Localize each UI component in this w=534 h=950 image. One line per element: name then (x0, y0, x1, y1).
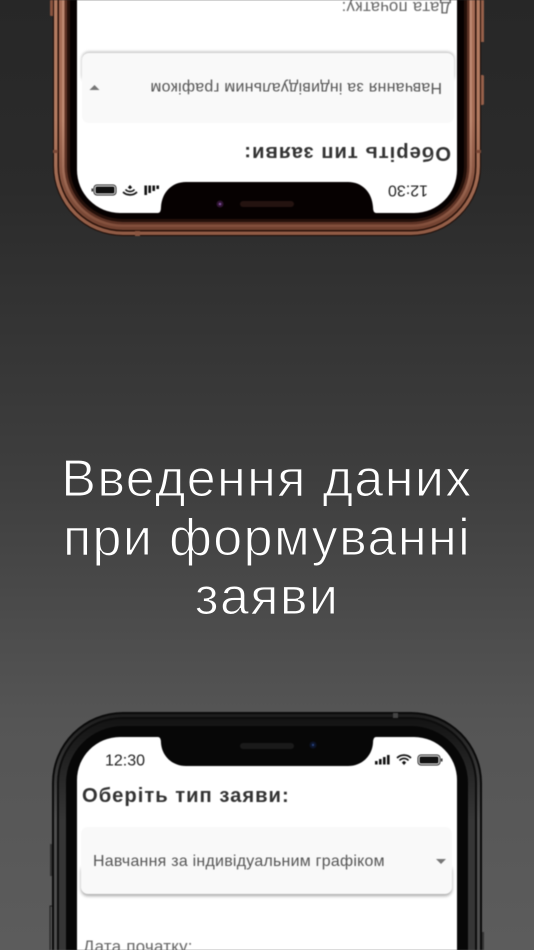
status bar time: 12:30 (105, 752, 145, 770)
status bar time: 12:30 (388, 182, 428, 198)
dropdown: Навчання за індивідуальним графіком (93, 853, 385, 870)
phone screen with notch (77, 0, 457, 213)
title: при формуванні (63, 508, 471, 566)
status icons (92, 185, 159, 195)
heading: Оберіть тип заяви: (82, 785, 290, 807)
title: Введення даних (61, 450, 473, 508)
notch camera and speaker (216, 200, 294, 208)
dropdown (82, 52, 454, 123)
phone: top rose gold, upside down (50, 0, 484, 236)
phone frame: black (50, 712, 484, 950)
title: заяви (195, 568, 339, 626)
phone: bottom black (49, 712, 484, 950)
title (61, 450, 473, 626)
phone frame: rose gold (50, 0, 484, 236)
heading: Оберіть тип заяви: (243, 142, 451, 164)
phone screen with notch (77, 737, 457, 950)
dropdown (81, 827, 452, 896)
notch camera and speaker (240, 742, 316, 749)
status icons (375, 755, 442, 765)
dropdown: Навчання за індивідуальним графіком (150, 79, 442, 96)
